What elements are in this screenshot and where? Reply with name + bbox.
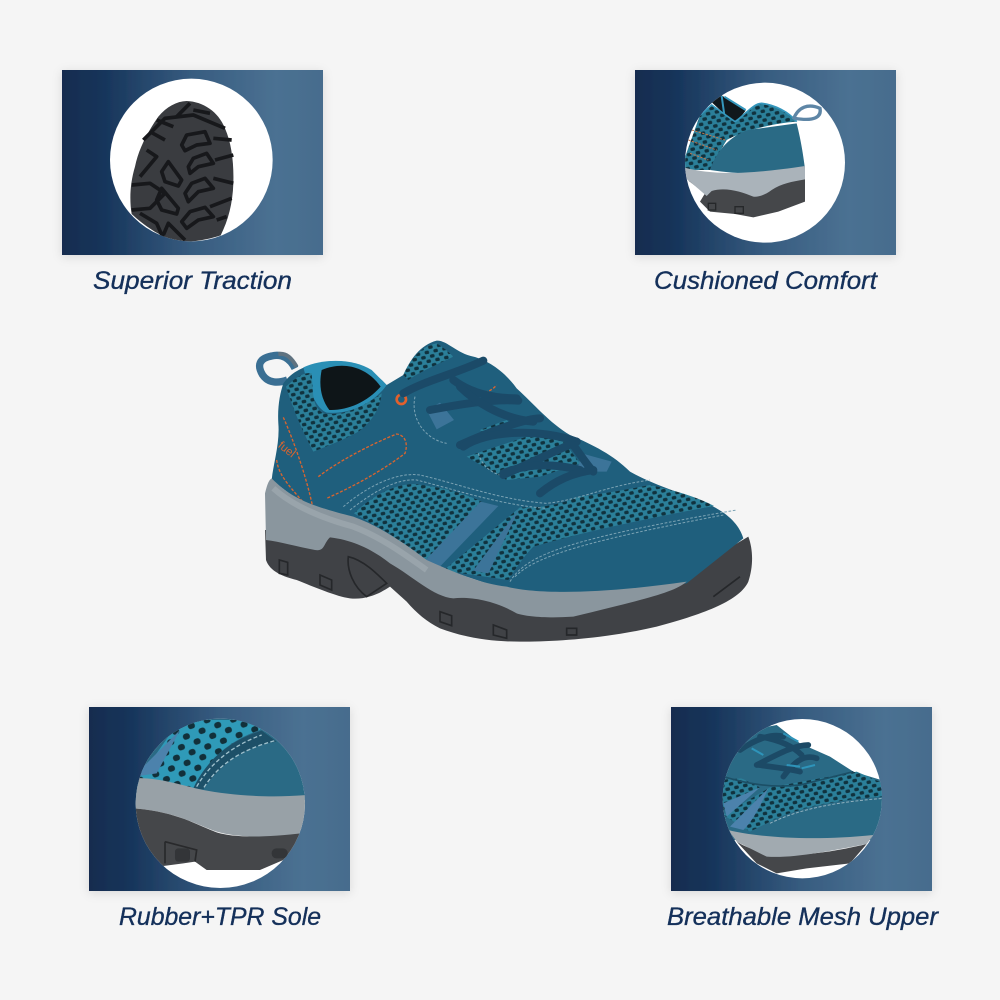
- collar and lining: [303, 361, 387, 413]
- vamp mesh right: [443, 485, 714, 580]
- stitching: [343, 397, 737, 582]
- midsole: [265, 478, 687, 617]
- lace eyelet: [397, 395, 406, 404]
- panel: breathable mesh upper: [667, 707, 940, 931]
- brand mark: fuel: [275, 440, 297, 460]
- icon: sole close-up in circle: [133, 717, 313, 888]
- icon: shoe outsole in circle: [110, 79, 273, 242]
- main shoe illustration: [260, 341, 752, 642]
- caption: Breathable Mesh Upper: [667, 903, 940, 931]
- icon: mesh upper close-up in circle: [720, 719, 887, 878]
- caption: Cushioned Comfort: [654, 267, 878, 295]
- vamp mesh left: [354, 484, 486, 562]
- panel: rubber+TPR sole: [89, 707, 350, 931]
- caption: Rubber+TPR Sole: [119, 903, 321, 931]
- outsole: [265, 530, 752, 642]
- upper: [272, 341, 743, 597]
- orange stitching: [277, 385, 497, 510]
- outsole lugs: [279, 557, 740, 638]
- icon: shoe heel in circle: [682, 83, 845, 243]
- heel mesh: [286, 373, 382, 452]
- caption: Superior Traction: [93, 267, 292, 295]
- heel pull tab: [260, 354, 297, 382]
- panel: cushioned comfort: [635, 70, 896, 295]
- lace area mesh: [467, 437, 580, 480]
- panel: superior traction: [62, 70, 323, 295]
- side webbing straps: [425, 403, 612, 573]
- laces: [403, 361, 593, 493]
- tongue mesh: [403, 343, 453, 380]
